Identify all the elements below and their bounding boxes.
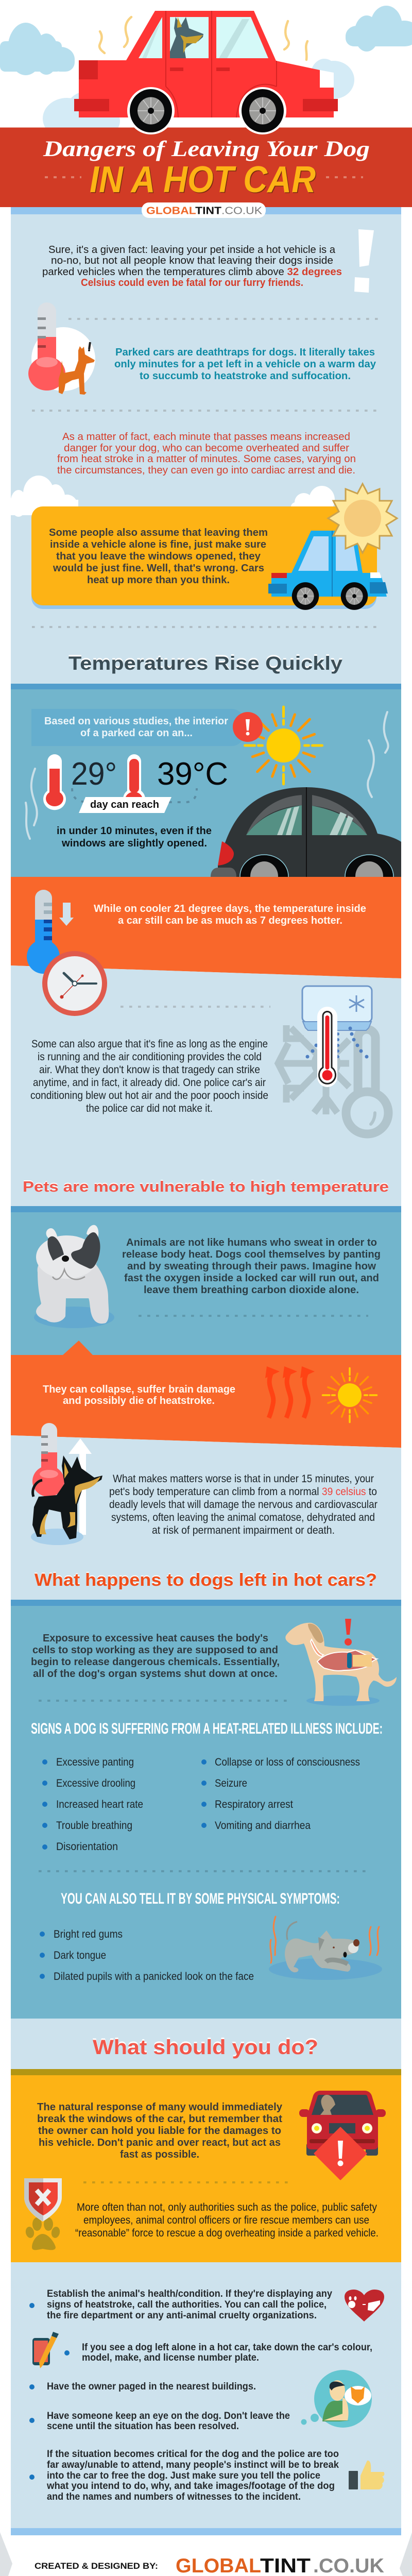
callout: studies speech box bbox=[31, 709, 247, 746]
list: signs left column: Excessive panting bbox=[56, 1756, 134, 1768]
text: natural response: his vehicle. Don't panic and over react, but act as bbox=[39, 2137, 281, 2148]
icon: heart with paw and hand bbox=[345, 2290, 384, 2321]
icon: red exclamation bbox=[345, 1619, 352, 1646]
list: signs left column: Excessive drooling bbox=[56, 1777, 135, 1789]
illustration: red car with dog bbox=[74, 11, 338, 134]
illustration: thermometer with black dog bbox=[31, 1423, 102, 1545]
text: matters worse: deadly levels that will damage the nervous and cardiovascular bbox=[109, 1499, 377, 1511]
heading: what happens: What happens to dogs left in hot cars? bbox=[35, 1570, 377, 1590]
text: collapse: and possibly die of heatstroke. bbox=[63, 1395, 215, 1406]
list: what to do steps bbox=[29, 2289, 372, 2502]
text: natural response bbox=[37, 2102, 283, 2160]
divider bbox=[32, 626, 377, 628]
label: day can reach: day can reach bbox=[90, 799, 159, 810]
illustration: pale sun bbox=[328, 484, 397, 553]
icon: clock bbox=[42, 951, 107, 1016]
text: police car argument: anytime, and in fact, it already did. One police car's air bbox=[33, 1077, 266, 1089]
red title band bbox=[0, 128, 412, 207]
text: police car argument: Some can also argue that it's fine as long as the engine bbox=[31, 1038, 268, 1050]
panel: yellow box: would be just fine. Well, that's wrong. Cars bbox=[53, 563, 264, 574]
callout: teal deathtrap text bbox=[114, 347, 376, 382]
heading: temperatures rise quickly: Temperatures Rise Quickly bbox=[68, 653, 342, 674]
list: what to do steps: into the car to free the dog. Just make sure you tell the police bbox=[47, 2470, 320, 2481]
text: police car argument: conditioning blew out hot air and the poor pooch inside bbox=[30, 1090, 268, 1101]
text: police car argument bbox=[30, 1038, 268, 1114]
credit line bbox=[35, 2555, 384, 2576]
text: natural response: fast as possible. bbox=[120, 2149, 199, 2160]
credit line: CREATED & DESIGNED BY: bbox=[35, 2561, 158, 2571]
icon: phone and pencil bbox=[32, 2332, 59, 2368]
title bbox=[43, 137, 370, 201]
list: what to do steps: scene until the situation has been resolved. bbox=[47, 2421, 239, 2432]
intro text: Sure, it's a given fact: leaving your pet inside a hot vehicle is a bbox=[48, 244, 336, 256]
text: exposure: begin to release dangerous chemicals. Essentially, bbox=[31, 1656, 280, 1668]
icon: heat waves in teal panel bbox=[26, 712, 388, 839]
list: what to do steps: If you see a dog left alone in a hot car, take down the car's colour, bbox=[82, 2342, 372, 2353]
intro text bbox=[42, 244, 342, 289]
thermometer 29 degrees bbox=[43, 754, 66, 810]
illustration: bulldog bbox=[34, 1225, 114, 1328]
icon: red alert circle bbox=[233, 712, 263, 742]
text: authorities: “reasonable” force to rescue a dog overheating inside a parked vehicle. bbox=[75, 2227, 379, 2239]
text: in under 10 minutes: windows are slightly opened. bbox=[61, 838, 207, 849]
text: animals not like humans: Animals are not like humans who sweat in order to bbox=[126, 1237, 377, 1248]
panel: yellow box: Some people also assume that leaving them bbox=[49, 527, 268, 538]
thermometer 39 degrees bbox=[123, 754, 145, 807]
illustration: person thinking of dog bbox=[301, 2370, 372, 2428]
list: physical symptoms: Dilated pupils with a panicked look on the face bbox=[54, 1971, 254, 1982]
panel: yellow box: heat up more than you think. bbox=[87, 574, 230, 586]
icon: shield with cross bbox=[24, 2178, 62, 2222]
list: physical symptoms: Dark tongue bbox=[54, 1950, 106, 1961]
text: exposure: Exposure to excessive heat causes the body's bbox=[43, 1633, 268, 1644]
list: what to do steps: the fire department or any anti-animal cruelty organizations. bbox=[47, 2310, 317, 2321]
red paragraph: the circumstances, they can even go into cardiac arrest and die. bbox=[57, 465, 355, 476]
divider bbox=[83, 2181, 288, 2183]
heading: what should you do: What should you do? bbox=[93, 2035, 318, 2057]
list: physical symptoms bbox=[40, 1928, 254, 1982]
text: exposure: all of the dog's organ systems shut down at once. bbox=[33, 1668, 278, 1680]
illustration: grey panting dog bbox=[269, 1917, 382, 1980]
text: collapse bbox=[43, 1384, 235, 1406]
divider bbox=[39, 1700, 287, 1702]
background icon: grey thermometer bbox=[346, 1029, 388, 1134]
panel: yellow box: that you leave the windows opened, they bbox=[56, 551, 261, 562]
text: police car argument: the police car did not make it. bbox=[86, 1103, 213, 1114]
temperature values: 39°C bbox=[157, 756, 228, 792]
logo pill bbox=[142, 202, 266, 218]
heading: temperatures rise quickly: Temperatures Rise Quickly bbox=[68, 651, 342, 672]
list: physical symptoms: Bright red gums bbox=[54, 1928, 123, 1940]
text: in under 10 minutes bbox=[57, 825, 212, 849]
icon: paw bbox=[25, 2217, 61, 2250]
title: Dangers of Leaving Your Dog bbox=[43, 137, 370, 161]
text: exposure bbox=[31, 1633, 280, 1680]
list: what to do steps: Have the owner paged in the nearest buildings. bbox=[47, 2381, 256, 2392]
red paragraph: As a matter of fact, each minute that passes means increased bbox=[62, 431, 350, 443]
text: animals not like humans: leave them breathing carbon dioxide alone. bbox=[144, 1284, 359, 1296]
text: natural response: The natural response of many would immediately bbox=[37, 2102, 283, 2113]
illustration: tan dog with organs bbox=[285, 1623, 397, 1706]
list: signs right column bbox=[201, 1756, 360, 1832]
divider bbox=[139, 1315, 368, 1317]
dog in car window bbox=[170, 17, 203, 58]
temperature values bbox=[71, 756, 228, 792]
divider bbox=[39, 1870, 367, 1872]
icon: blue thermometer bbox=[27, 890, 60, 974]
text: animals not like humans: release body heat. Dogs cool themselves by panting bbox=[122, 1249, 381, 1260]
text: police car argument: is running and the air conditioning provides the cold bbox=[38, 1051, 262, 1063]
orange text: cooler days bbox=[94, 903, 366, 926]
illustration: black car bbox=[211, 787, 401, 877]
callout: teal deathtrap text: Parked cars are deathtraps for dogs. It literally takes bbox=[115, 347, 375, 358]
callout: studies speech box: Based on various studies, the interior bbox=[44, 716, 228, 727]
icon: red thermometer in capsule bbox=[317, 1007, 337, 1087]
list: signs left column: Increased heart rate bbox=[56, 1799, 143, 1810]
list: what to do steps: Have someone keep an eye on the dog. Don't leave the bbox=[47, 2411, 290, 2421]
text: in under 10 minutes: in under 10 minutes, even if the bbox=[57, 825, 212, 837]
red paragraph: danger for your dog, who can become overheated and suffer bbox=[64, 443, 349, 454]
list: signs right column: Seizure bbox=[215, 1777, 247, 1789]
text: animals not like humans bbox=[122, 1237, 381, 1296]
divider bbox=[68, 318, 379, 320]
icon: thumbs up bbox=[349, 2461, 384, 2489]
list: signs left column bbox=[42, 1756, 143, 1853]
illustration: red car front with warning diamond bbox=[299, 2091, 386, 2179]
intro text: Celsius could even be fatal for our furry friends. bbox=[81, 277, 303, 289]
icon: yellow sun bbox=[245, 707, 322, 784]
list: what to do steps: model, make, and license number plate. bbox=[82, 2352, 259, 2363]
orange text: cooler days: While on cooler 21 degree days, the temperature inside bbox=[94, 903, 366, 914]
text: authorities: More often than not, only authorities such as the police, public safety bbox=[77, 2201, 377, 2213]
logo pill: GLOBAL TINT .CO.UK bbox=[146, 205, 263, 216]
icon: heat arrows bbox=[265, 1366, 315, 1418]
icon: heat waves around car bbox=[99, 17, 307, 60]
heading: what happens: What happens to dogs left in hot cars? bbox=[35, 1569, 377, 1589]
red paragraph: from heat stroke in a matter of minutes. Some cases, varying on bbox=[57, 453, 356, 465]
list: what to do steps: Establish the animal's health/condition. If they're displaying any bbox=[47, 2289, 332, 2299]
red paragraph bbox=[57, 431, 356, 476]
text: animals not like humans: fast the oxygen inside a locked car will run out, and bbox=[124, 1273, 379, 1284]
list: what to do steps: signs of heatstroke, call the authorities. You can call the police, bbox=[47, 2299, 327, 2310]
callout: teal deathtrap text: only minutes for a pet left in a vehicle on a warm day bbox=[114, 359, 376, 370]
intro text: parked vehicles when the temperatures climb above 32 degrees bbox=[42, 266, 342, 278]
divider bbox=[32, 410, 377, 412]
list: signs left column: Disorientation bbox=[56, 1841, 118, 1853]
title: IN A HOT CAR bbox=[91, 160, 316, 201]
text: matters worse: What makes matters worse is that in under 15 minutes, your bbox=[113, 1473, 374, 1485]
intro text: no-no, but not all people know that leaving their dogs inside bbox=[51, 255, 333, 266]
text: collapse: They can collapse, suffer brain damage bbox=[43, 1384, 235, 1395]
list: signs right column: Collapse or loss of consciousness bbox=[215, 1756, 360, 1768]
text: authorities bbox=[75, 2201, 379, 2239]
panel: yellow box: inside a vehicle alone is fine, just make sure bbox=[50, 539, 266, 550]
background icon: grey snowflake bbox=[276, 1023, 349, 1114]
panel: yellow box bbox=[31, 506, 377, 609]
text: matters worse bbox=[109, 1473, 377, 1536]
heading: what should you do: What should you do? bbox=[93, 2036, 318, 2059]
text: matters worse: pet's body temperature can climb from a normal 39 celsius to bbox=[109, 1486, 377, 1498]
icon: down arrow bbox=[59, 903, 74, 926]
list: what to do steps: far away/unable to attend, many people's instinct will be to break bbox=[47, 2460, 339, 2470]
white clouds bbox=[10, 476, 335, 520]
heading: pets vulnerable: Pets are more vulnerable to high temperature bbox=[23, 1178, 389, 1194]
icon: air conditioner bbox=[302, 986, 372, 1058]
list: signs right column: Respiratory arrest bbox=[215, 1799, 293, 1810]
orange text: cooler days: a car still can be as much as 7 degrees hotter. bbox=[118, 915, 342, 926]
callout: studies speech box: of a parked car on an... bbox=[80, 727, 193, 739]
orange triangle pointer bbox=[63, 1341, 93, 1355]
list: what to do steps: If the situation becomes critical for the dog and the police are too bbox=[47, 2449, 339, 2460]
callout: teal deathtrap text: to succumb to heatstroke and suffocation. bbox=[140, 370, 351, 382]
text: matters worse: systems, often leaving the animal comatose, dehydrated and bbox=[111, 1512, 375, 1523]
temperature values: 29° bbox=[71, 756, 117, 792]
list: what to do steps: and the names and numbers of witnesses to the incident. bbox=[47, 2492, 301, 2502]
list: signs right column: Vomiting and diarrhea bbox=[215, 1820, 311, 1832]
divider bbox=[121, 1006, 270, 1008]
text: natural response: break the windows of the car, but remember that bbox=[37, 2113, 282, 2125]
title: IN A HOT CAR bbox=[90, 159, 316, 200]
footer side chevrons bbox=[0, 2532, 412, 2576]
dotted arc bbox=[72, 788, 197, 802]
heading: pets vulnerable: Pets are more vulnerable to high temperature bbox=[23, 1179, 389, 1195]
icon: white exclamation bbox=[354, 229, 374, 293]
text: natural response: the owner can hold you liable for the damages to bbox=[38, 2125, 281, 2137]
text: authorities: employees, animal control officers or fire rescue members can use bbox=[83, 2214, 369, 2226]
illustration: thermometer with orange dog bbox=[28, 302, 95, 395]
illustration: blue car bbox=[268, 531, 388, 610]
label: day can reach bbox=[79, 797, 171, 813]
text: police car argument: air. What they don't know is that tragedy can strike bbox=[39, 1064, 260, 1076]
list: signs left column: Trouble breathing bbox=[56, 1820, 132, 1832]
list: what to do steps: what you intend to do, why, and take images/footage of the dog bbox=[46, 2481, 335, 2492]
text: exposure: cells to stop working as they are supposed to and bbox=[32, 1645, 278, 1656]
icon: sun in orange band bbox=[322, 1368, 377, 1422]
text: matters worse: at risk of permanent impairment or death. bbox=[152, 1524, 335, 1536]
header clouds bbox=[0, 6, 412, 140]
text: animals not like humans: and by sweating through their paws. Imagine how bbox=[127, 1261, 376, 1272]
